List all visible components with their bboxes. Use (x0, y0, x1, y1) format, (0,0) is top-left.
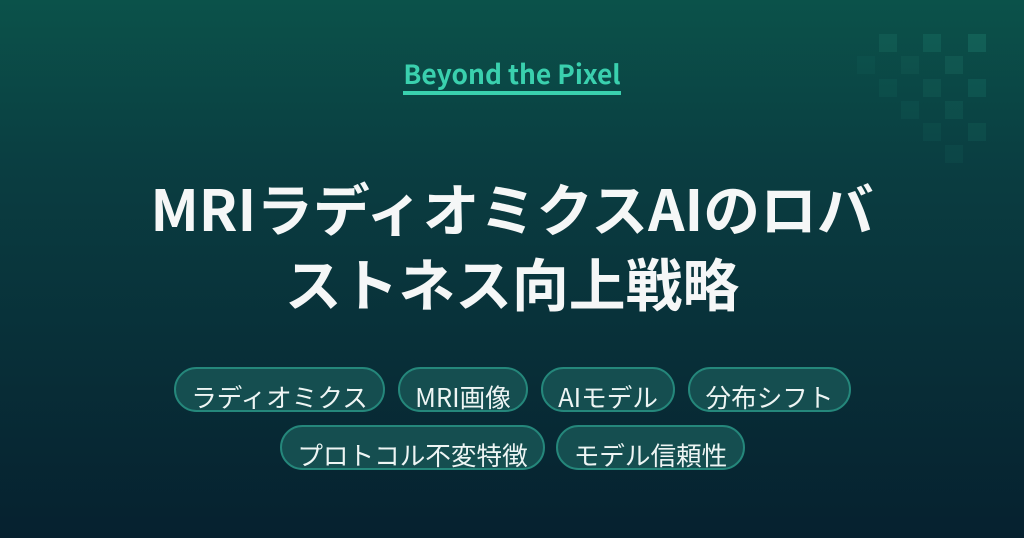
tag: ラディオミクス: ラディオミクス (191, 378, 368, 415)
main title: ストネス向上戦略 (285, 241, 739, 323)
tag: プロトコル不変特徴 (280, 425, 545, 470)
tag: AIモデル (541, 367, 675, 412)
tag: AIモデル: AIモデル (558, 378, 658, 415)
tag: MRI画像 (398, 367, 528, 412)
eyebrow heading: Beyond the Pixel: Beyond the Pixel (403, 53, 621, 92)
tag pills (174, 367, 851, 473)
tag: 分布シフト: 分布シフト (706, 378, 833, 415)
tag: モデル信頼性 (556, 425, 745, 470)
tag: ラディオミクス (174, 367, 385, 412)
main title: MRIラディオミクスAIのロバ (150, 166, 874, 248)
tag: MRI画像: MRI画像 (415, 378, 511, 415)
main title (150, 166, 874, 323)
decorative pixel grid icon (879, 34, 986, 141)
tag: 分布シフト (688, 367, 851, 412)
tag: モデル信頼性: モデル信頼性 (574, 436, 727, 473)
tag: プロトコル不変特徴: プロトコル不変特徴 (297, 436, 528, 473)
